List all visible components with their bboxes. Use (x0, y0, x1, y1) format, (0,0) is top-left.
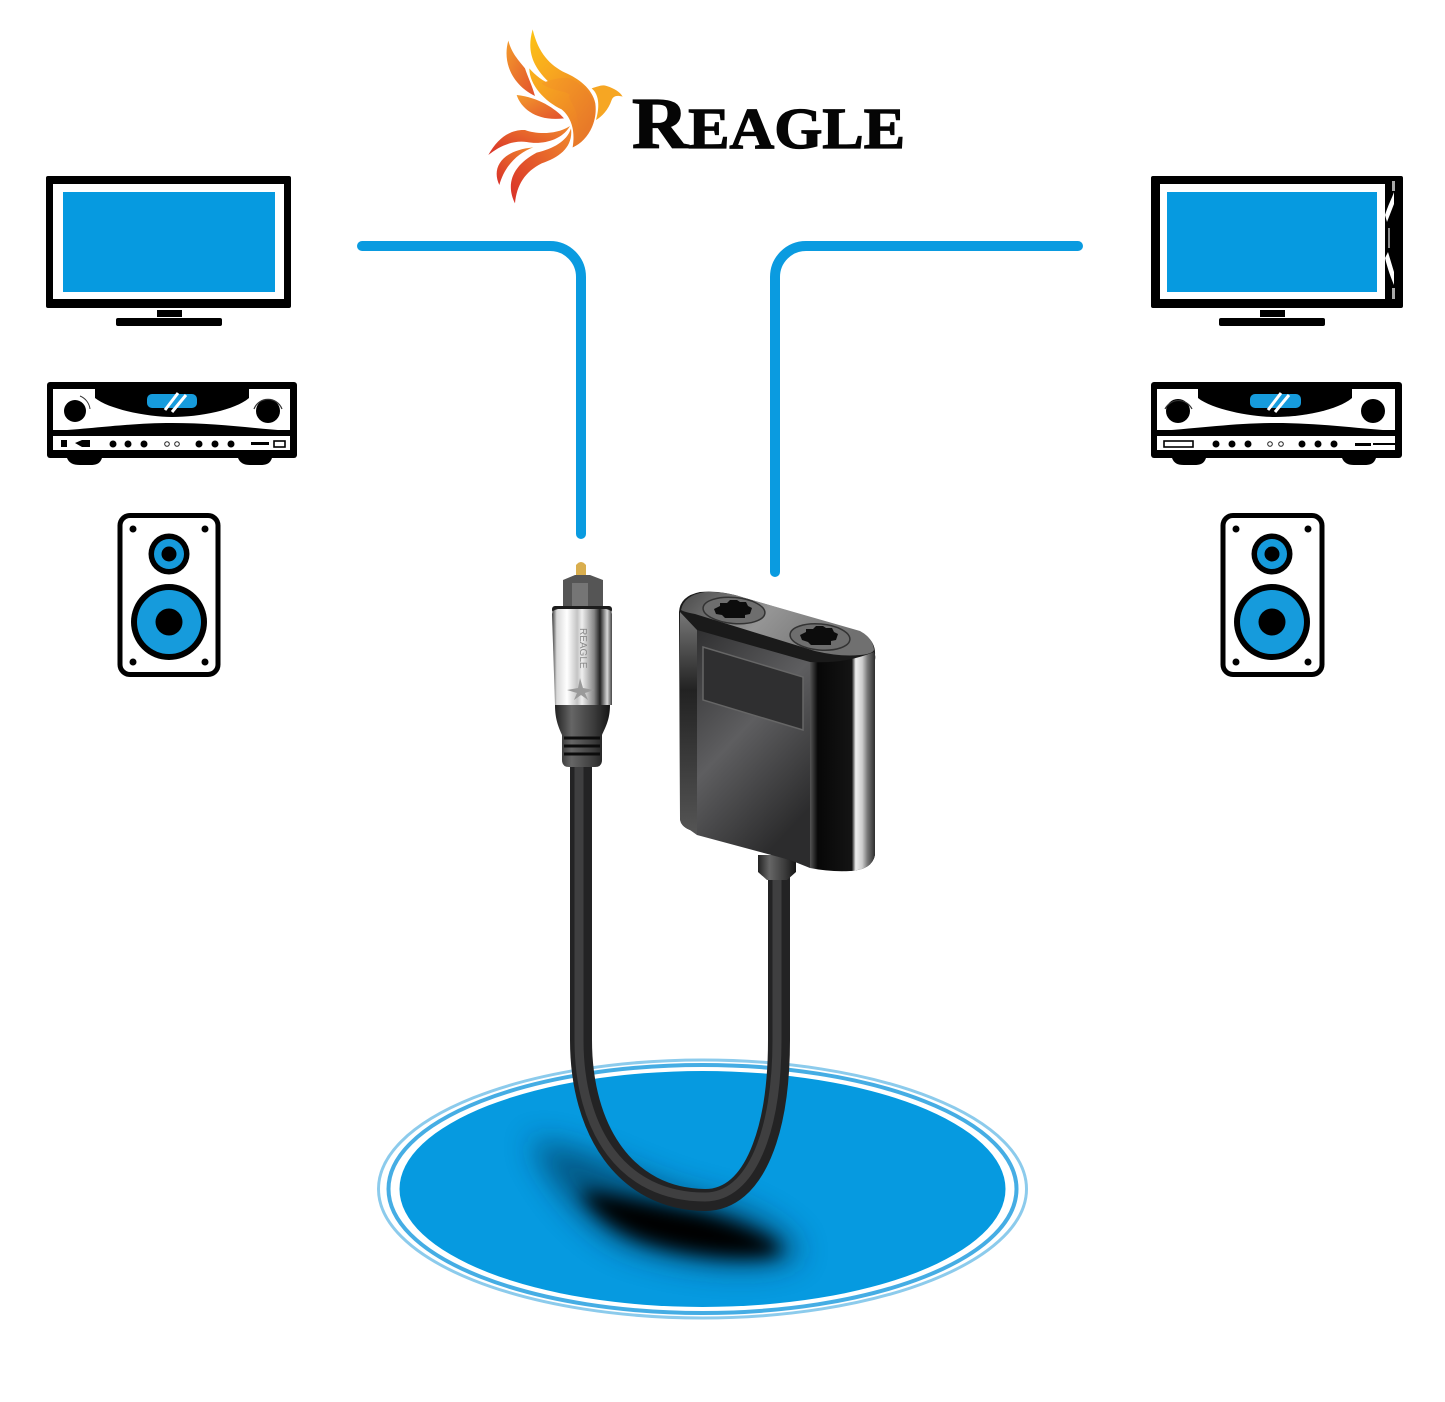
split cable (579, 760, 779, 1200)
icon: right speaker (1223, 516, 1322, 674)
icon: left receiver (47, 382, 297, 465)
wordmark: REAGLE (632, 83, 905, 164)
icon: right receiver (1151, 382, 1402, 465)
splitter body (679, 592, 875, 880)
blue platform ellipse (378, 1060, 1026, 1318)
housing (679, 592, 875, 871)
arrow: left connector line (362, 246, 581, 534)
top face (681, 592, 874, 656)
cable shadow (530, 1140, 800, 1267)
icon: right TV (1151, 176, 1403, 326)
arrow: right connector line (775, 246, 1078, 572)
left edge (680, 612, 697, 835)
icon: phoenix (488, 29, 623, 203)
gold tip (576, 562, 586, 575)
sleeve branding: REAGLE (577, 628, 588, 669)
port 1 (702, 595, 766, 626)
label recess (703, 647, 803, 730)
strain relief (555, 705, 610, 767)
silver sleeve (552, 609, 612, 705)
icon: left speaker (120, 516, 218, 674)
neck (758, 855, 796, 880)
optical plug (552, 562, 612, 767)
port 2 (789, 621, 851, 653)
icon: left TV (46, 176, 291, 326)
front face (697, 630, 810, 868)
sleeve bird mark (567, 678, 594, 700)
logo: Reagle (488, 29, 905, 203)
right side (810, 652, 875, 871)
plug connector (563, 575, 603, 608)
